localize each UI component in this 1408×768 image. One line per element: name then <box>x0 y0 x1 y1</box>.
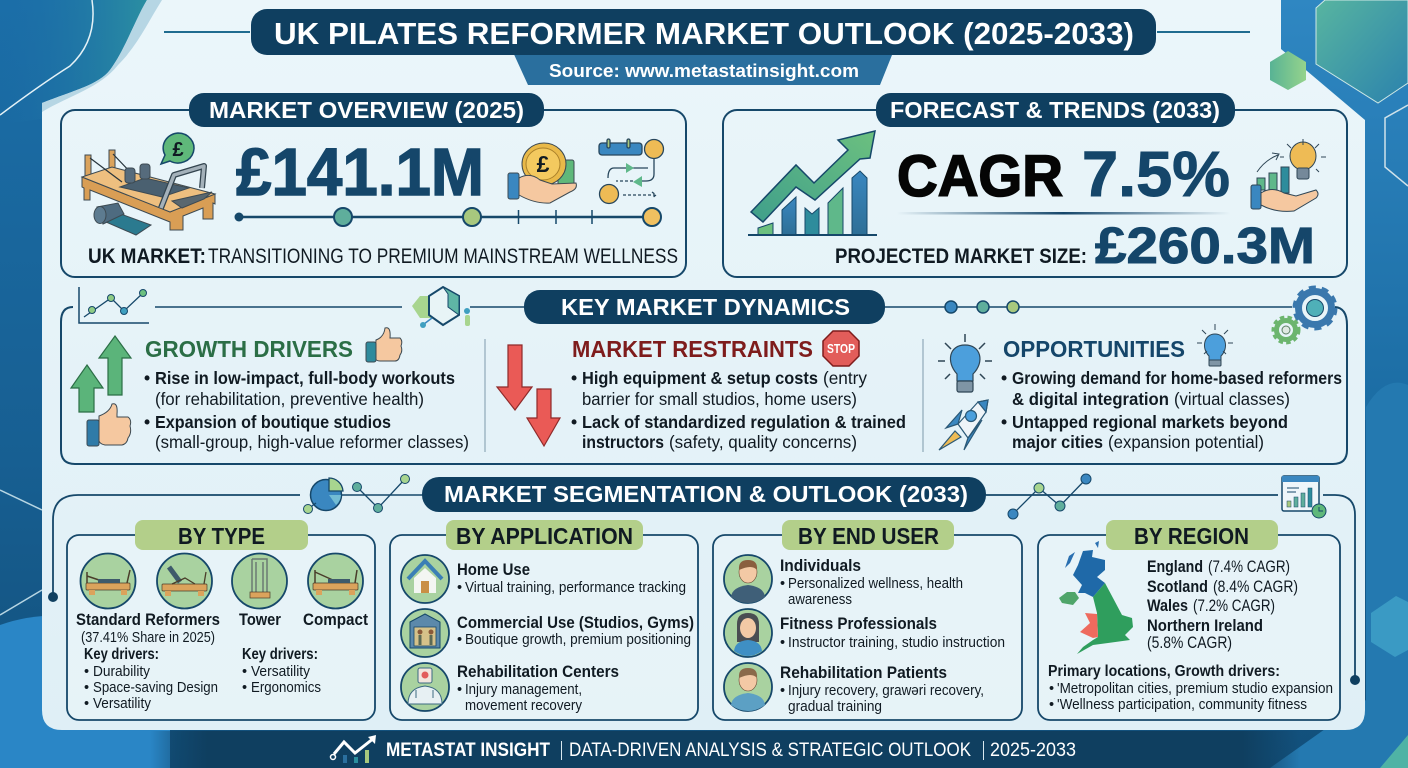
icon: rehabilitation clinician <box>401 663 449 711</box>
icon: thumbs up large <box>87 404 131 446</box>
icon: pie chart with nodes <box>304 474 410 514</box>
end user text: gradual training <box>788 699 882 715</box>
end user text: • <box>780 635 785 651</box>
regional CAGR list: Wales <box>1147 596 1188 615</box>
application text: • <box>457 632 462 648</box>
footer text <box>386 740 1076 761</box>
tag: by region <box>1106 520 1278 550</box>
icon: gears <box>1273 288 1336 343</box>
icon: small light bulb <box>1197 324 1233 366</box>
opportunity bullets: (virtual classes) <box>1174 389 1290 409</box>
card: by region <box>1038 520 1340 720</box>
regional CAGR list: England <box>1147 557 1203 576</box>
market value: £141.1M <box>236 135 484 210</box>
restraint bullets: barrier for small studios, home users) <box>582 389 857 409</box>
overview caption <box>88 245 678 268</box>
icon: stop sign <box>823 331 859 366</box>
heading: market restraints: MARKET RESTRAINTS <box>572 336 813 362</box>
heading: market overview: MARKET OVERVIEW (2025) <box>209 97 524 123</box>
driver bullets <box>144 368 469 452</box>
regional CAGR list: Scotland <box>1147 577 1208 596</box>
application text: • <box>457 682 462 698</box>
CAGR value <box>897 138 1230 210</box>
key drivers: left <box>84 646 218 712</box>
title <box>164 9 1250 85</box>
heading: market overview <box>189 93 544 127</box>
panel: forecast and trends <box>723 93 1347 277</box>
icon: green arrows <box>71 336 131 412</box>
icon: fitness professional <box>724 609 772 657</box>
card: by type <box>67 520 375 720</box>
application text <box>457 560 694 714</box>
application text: Rehabilitation Centers <box>457 662 619 681</box>
regional CAGR list: (8.4% CAGR) <box>1213 577 1298 596</box>
tag: by type <box>135 520 308 550</box>
end user text: • <box>780 683 785 699</box>
end user text: • <box>780 576 785 592</box>
driver bullets: Rise in low-impact, full-body workouts <box>155 368 455 388</box>
key drivers: left: • <box>84 696 89 712</box>
card: by end user <box>713 520 1022 720</box>
icon: hexagon network <box>412 287 470 328</box>
overview caption: TRANSITIONING TO PREMIUM MAINSTREAM WELLNESS <box>208 245 678 268</box>
tag: by region: BY REGION <box>1134 523 1249 549</box>
primary locations: • <box>1049 697 1054 713</box>
icon: red arrows <box>497 345 560 446</box>
section: market segmentation and outlook <box>48 474 1360 720</box>
key drivers: left: • <box>84 664 89 680</box>
footer text: 2025-2033 <box>990 740 1076 761</box>
tag: by end user: BY END USER <box>798 523 939 549</box>
type labels: Compact <box>303 610 368 629</box>
icon: payment flow <box>599 139 664 204</box>
regional CAGR list: (7.2% CAGR) <box>1193 596 1275 615</box>
tag: by type: BY TYPE <box>178 523 265 549</box>
column: growth drivers <box>71 328 469 452</box>
key drivers: left: Durability <box>93 664 151 680</box>
projected market size: PROJECTED MARKET SIZE: <box>835 245 1087 268</box>
icon: standard reformer <box>80 554 136 608</box>
heading: opportunities: OPPORTUNITIES <box>1003 336 1185 362</box>
icon: thumbs up small <box>366 328 402 362</box>
key drivers: left: • <box>84 680 89 696</box>
icon: coin in hand <box>508 143 576 203</box>
tag: by application: BY APPLICATION <box>456 523 633 549</box>
source tab: Source: www.metastatinsight.com <box>549 61 859 81</box>
icon: studio <box>401 609 449 657</box>
key drivers: right: Ergonomics <box>251 680 321 696</box>
application text: Boutique growth, premium positioning <box>465 632 691 648</box>
type labels: Standard Reformers <box>76 610 220 629</box>
primary locations <box>1048 663 1333 713</box>
opportunity bullets: Untapped regional markets beyond <box>1012 412 1288 432</box>
restraint bullets <box>571 368 906 452</box>
heading: market segmentation: MARKET SEGMENTATION & OUTLOOK (2033) <box>444 481 968 507</box>
type labels: Tower <box>239 610 281 629</box>
icon: large light bulb <box>938 334 992 392</box>
restraint bullets: • <box>571 412 577 432</box>
restraint bullets: (entry <box>823 368 867 388</box>
icon: coin in hand: £ <box>537 151 550 177</box>
heading: key market dynamics <box>524 290 885 324</box>
application text: Commercial Use (Studios, Gyms) <box>457 613 694 632</box>
restraint bullets: Lack of standardized regulation & trained <box>582 412 906 432</box>
panel: key market dynamics <box>61 287 1347 464</box>
projected market size <box>835 217 1315 274</box>
opportunity bullets <box>1001 368 1342 452</box>
CAGR value: CAGR <box>897 144 1063 209</box>
end user text: Instructor training, studio instruction <box>788 635 1005 651</box>
regional CAGR list: (7.4% CAGR) <box>1208 557 1290 576</box>
footer bar <box>150 731 1300 768</box>
footer text: METASTAT INSIGHT <box>386 740 550 761</box>
heading: forecast <box>876 93 1235 127</box>
driver bullets: (for rehabilitation, preventive health) <box>155 389 424 409</box>
end user text: Individuals <box>780 556 861 575</box>
opportunity bullets: major cities <box>1012 432 1103 452</box>
column: market restraints <box>497 331 906 452</box>
key drivers: left: Space-saving Design <box>93 680 218 696</box>
footer text: DATA-DRIVEN ANALYSIS & STRATEGIC OUTLOOK <box>569 740 971 761</box>
opportunity bullets: • <box>1001 412 1007 432</box>
footer logo <box>330 735 376 763</box>
end user text: Rehabilitation Patients <box>780 663 947 682</box>
regional CAGR list <box>1147 557 1298 652</box>
icon: rehabilitation patient <box>724 663 772 711</box>
application text: Injury management, <box>465 682 582 698</box>
regional CAGR list: (5.8% CAGR) <box>1147 633 1232 652</box>
key drivers: left: Versatility <box>93 696 152 712</box>
primary locations: 'Metropolitan cities, premium studio expansion <box>1057 681 1333 697</box>
key drivers: left: Key drivers: <box>84 646 159 663</box>
application text: • <box>457 580 462 596</box>
type labels: (37.41% Share in 2025) <box>81 630 215 646</box>
primary locations: • <box>1049 681 1054 697</box>
icon: pound speech bubble <box>161 133 194 164</box>
driver bullets: (small-group, high-value reformer classes) <box>155 432 469 452</box>
opportunity bullets: • <box>1001 368 1007 388</box>
end user text: Injury recovery, grawəri recovery, <box>788 683 984 699</box>
driver bullets: Expansion of boutique studios <box>155 412 391 432</box>
overview caption: UK MARKET: <box>88 245 206 268</box>
key drivers: right: • <box>242 680 247 696</box>
icon: reformer <box>82 150 215 235</box>
icon: stop sign: STOP <box>827 341 855 356</box>
heading: market segmentation <box>422 477 986 512</box>
restraint bullets: instructors <box>582 432 664 452</box>
icon: growth chart <box>748 131 877 235</box>
timeline dots <box>945 301 1019 313</box>
regional CAGR list: Northern Ireland <box>1147 616 1263 635</box>
icon: home <box>401 555 449 603</box>
timeline <box>234 208 661 226</box>
projected market size: £260.3M <box>1095 217 1315 274</box>
icon: line chart <box>79 287 149 323</box>
restraint bullets: • <box>571 368 577 388</box>
primary locations: Primary locations, Growth drivers: <box>1048 663 1280 680</box>
application text: movement recovery <box>465 698 583 714</box>
icon: trend nodes <box>1008 474 1091 519</box>
key drivers: right: Key drivers: <box>242 646 318 663</box>
hexagon accent <box>1270 51 1306 90</box>
opportunity bullets: & digital integration <box>1012 389 1169 409</box>
end user text: awareness <box>788 592 852 608</box>
primary locations: 'Wellness participation, community fitness <box>1057 697 1307 713</box>
panel: market overview <box>61 93 686 277</box>
key drivers: right: Versatility <box>251 664 311 680</box>
key drivers: right: • <box>242 664 247 680</box>
wave accent <box>42 0 162 112</box>
heading: key market dynamics: KEY MARKET DYNAMICS <box>561 294 850 320</box>
opportunity bullets: Growing demand for home-based reformers <box>1012 368 1342 388</box>
restraint bullets: (safety, quality concerns) <box>669 432 857 452</box>
heading: forecast: FORECAST & TRENDS (2033) <box>890 97 1220 123</box>
restraint bullets: High equipment & setup costs <box>582 368 818 388</box>
opportunity bullets: (expansion potential) <box>1108 432 1264 452</box>
type labels <box>76 610 368 646</box>
key drivers: right <box>242 646 321 696</box>
CAGR value: 7.5% <box>1082 138 1230 210</box>
card: by application <box>390 520 698 720</box>
title: UK PILATES REFORMER MARKET OUTLOOK (2025-2033) <box>274 16 1134 51</box>
heading: growth drivers: GROWTH DRIVERS <box>145 336 353 362</box>
column: opportunities <box>938 324 1342 452</box>
map: UK regions <box>1059 541 1133 654</box>
icon: pound speech bubble: £ <box>172 139 184 161</box>
icon: rocket <box>939 400 988 450</box>
application text: Virtual training, performance tracking <box>465 580 686 596</box>
icon: tilted reformer <box>157 554 212 608</box>
icon: individual <box>724 555 772 603</box>
icon: dashboard window <box>1282 476 1326 518</box>
source tab <box>512 50 894 85</box>
icon: compact reformer <box>308 554 363 608</box>
end user text: Fitness Professionals <box>780 614 937 633</box>
end user text: Personalized wellness, health <box>788 576 963 592</box>
icon: tower <box>232 554 287 608</box>
application text: Home Use <box>457 560 530 579</box>
driver bullets: • <box>144 412 150 432</box>
icon: hand with bars and bulb <box>1251 139 1326 211</box>
end user text <box>780 556 1005 715</box>
driver bullets: • <box>144 368 150 388</box>
